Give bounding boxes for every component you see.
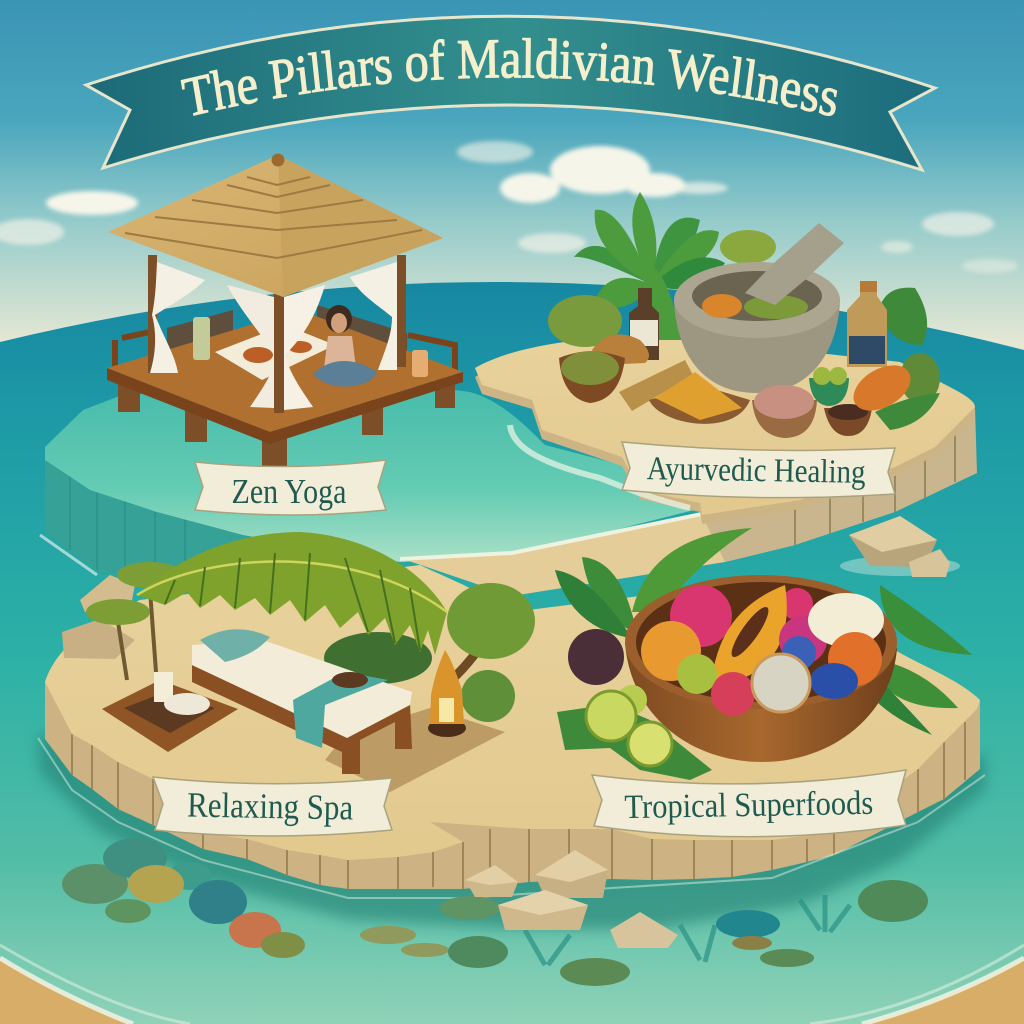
stone wall: [45, 682, 980, 889]
sand strip: [400, 500, 800, 596]
limes: [617, 685, 647, 715]
tray with candle: [102, 680, 238, 752]
label: Zen Yoga: [195, 460, 386, 515]
sky background: [0, 0, 1024, 360]
wooden floor: [325, 708, 505, 792]
trees: [440, 640, 485, 690]
spice bowl: [824, 408, 872, 436]
thatched roof: [108, 155, 443, 297]
label: Relaxing Spa: [153, 777, 392, 836]
orange root and leaves: [875, 393, 940, 430]
small palms: [118, 590, 156, 680]
curtains: [150, 262, 205, 373]
underwater reef: [62, 838, 928, 986]
lantern: [428, 719, 466, 737]
island wall: [702, 407, 977, 562]
label: Relaxing Spa: Relaxing Spa: [187, 786, 354, 828]
bowl: [625, 642, 897, 762]
panel: Zen Yoga lagoon slab: [40, 385, 702, 592]
illustration: Ayurvedic Healing still life: [548, 192, 940, 438]
rocks: offshore: [840, 516, 960, 577]
label: Ayurvedic Healing: Ayurvedic Healing: [646, 449, 866, 490]
illustration: Relaxing Spa: [62, 532, 535, 792]
beach foreground: [0, 945, 1024, 1024]
clouds: [0, 141, 1018, 273]
panel: Relaxing Spa and Tropical Superfoods island: [38, 565, 985, 898]
illustration: Zen Yoga pavilion: [107, 154, 463, 467]
illustration: Tropical Superfoods bowl: [555, 528, 972, 780]
label: Ayurvedic Healing: [622, 442, 895, 498]
bowl of herbs: [592, 334, 649, 365]
palm frond: [137, 532, 447, 655]
leaves: [632, 528, 752, 612]
sand surface: [475, 337, 975, 515]
label: Zen Yoga: Zen Yoga: [232, 472, 346, 510]
sand surface: [45, 565, 980, 860]
rocks behind: [80, 575, 135, 612]
ginger root: [619, 360, 693, 411]
ocean: [0, 282, 1024, 1024]
oil bottle left: [629, 288, 659, 360]
title text: The Pillars of Maldivian Wellness: [180, 38, 838, 116]
deck: [107, 310, 463, 432]
person: [326, 305, 352, 333]
spa bed: [192, 665, 412, 774]
pink bowl: [752, 400, 817, 438]
bed and pillows: [215, 325, 335, 380]
fruits: [670, 585, 732, 647]
mortar and pestle: [674, 300, 840, 393]
label: Tropical Superfoods: Tropical Superfoods: [624, 784, 874, 827]
water shadow under island: [38, 735, 985, 930]
label: Tropical Superfoods: [592, 770, 906, 837]
back walls: [167, 305, 407, 370]
center post: [274, 290, 284, 413]
green cup: [809, 378, 849, 406]
turmeric plate: [649, 385, 750, 424]
palm and greenery: [574, 192, 725, 340]
banner: title: [82, 14, 939, 172]
posts: [148, 255, 157, 373]
legs: [118, 380, 140, 412]
panel: Ayurvedic Healing island: [400, 337, 977, 596]
amber bottle right: [847, 282, 887, 367]
rim: [475, 346, 975, 524]
